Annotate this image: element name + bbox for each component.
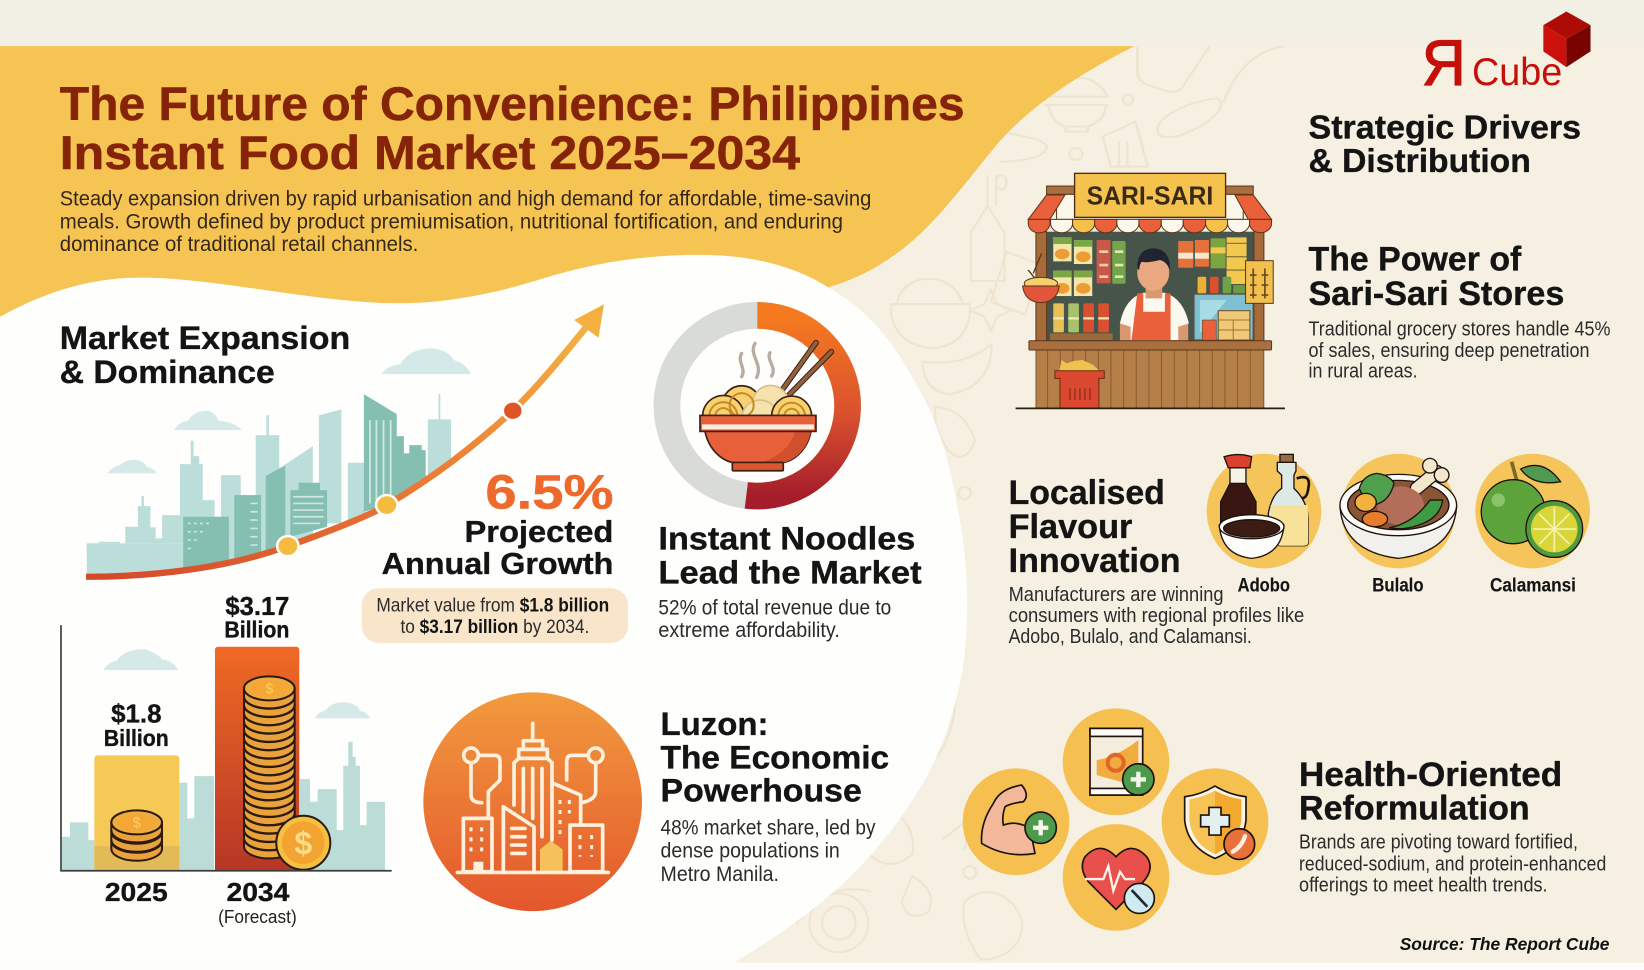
Luzon text: Powerhouse — [661, 773, 862, 809]
donut chart: noodles 52% — [667, 315, 848, 496]
flavour text: Localised — [1009, 474, 1165, 512]
skyline behind bars — [62, 742, 385, 870]
coin stack 2034 — [244, 676, 295, 858]
health icons — [963, 708, 1268, 931]
label: Bulalo — [1372, 576, 1424, 597]
market value pill: Market value from $1.8 billion — [376, 594, 609, 616]
top band — [0, 0, 1644, 46]
skyline growth chart — [86, 304, 604, 590]
store sign: SARI-SARI — [1087, 180, 1213, 210]
intro text — [60, 187, 871, 256]
bar chart: market value: 2034 — [226, 877, 290, 907]
flavour text: Manufacturers are winning — [1009, 583, 1224, 606]
intro text: dominance of traditional retail channels. — [60, 232, 418, 256]
clouds behind bars — [103, 649, 370, 718]
heading: strategic drivers — [1308, 109, 1581, 180]
icon: protein muscle — [963, 768, 1069, 875]
noodles text: 52% of total revenue due to — [658, 597, 891, 620]
till and goods — [1194, 294, 1253, 340]
hanging noodle bowl — [1023, 253, 1059, 303]
sari-sari text — [1308, 241, 1610, 383]
flavour text — [1009, 474, 1304, 648]
counter — [1029, 341, 1272, 408]
heading: market expansion: Market Expansion — [60, 320, 350, 356]
noodles text: Lead the Market — [658, 555, 922, 591]
title — [60, 77, 965, 179]
icon: bulalo — [1340, 454, 1457, 568]
value labels: $3.17 — [225, 591, 289, 621]
icon: adobo — [1207, 454, 1321, 568]
coin stack 2025: $ — [133, 815, 141, 831]
source note: Source: The Report Cube — [1400, 934, 1609, 954]
flavour icons — [1207, 454, 1590, 597]
sari-sari text: Sari-Sari Stores — [1308, 275, 1564, 313]
white content blob — [0, 255, 967, 963]
coin stack 2034: $ — [265, 681, 273, 697]
coin stack 2025 — [111, 810, 162, 861]
chart axes — [61, 625, 392, 871]
icon: Luzon city circle — [423, 692, 642, 911]
intro text: Steady expansion driven by rapid urbanisation and high demand for affordable, time-saving — [60, 187, 871, 211]
illustration: sari-sari store — [1016, 173, 1285, 408]
title: The Future of Convenience: Philippines — [60, 77, 965, 130]
bar chart: market value — [61, 591, 392, 927]
title: Instant Food Market 2025–2034 — [60, 126, 800, 179]
sari-sari text: in rural areas. — [1308, 360, 1418, 383]
bar chart: market value: (Forecast) — [218, 906, 297, 927]
year labels: 2025 — [105, 877, 168, 907]
bottom band — [0, 963, 1644, 970]
icon: calamansi — [1475, 454, 1590, 568]
bar chart: market value: Billion — [104, 725, 169, 751]
icon: shield — [1162, 768, 1268, 875]
Luzon text — [661, 706, 889, 886]
icon: fortified packet — [1063, 708, 1169, 815]
growth callout: Projected — [464, 515, 613, 549]
windows — [471, 800, 592, 857]
label: Calamansi — [1490, 576, 1576, 597]
health text: Health-Oriented — [1299, 756, 1562, 794]
logo: RCube — [1422, 12, 1591, 99]
hanging goods — [1050, 237, 1247, 340]
sari-sari text: of sales, ensuring deep penetration — [1308, 339, 1589, 362]
Luzon text: Metro Manila. — [661, 863, 779, 886]
growth callout: 6.5% — [485, 466, 613, 520]
heading: strategic drivers: & Distribution — [1308, 143, 1531, 180]
Luzon text: Luzon: — [661, 706, 769, 742]
Luzon text: The Economic — [661, 740, 889, 776]
light buildings — [87, 394, 451, 573]
noodles text — [658, 520, 922, 642]
bar 2025 — [94, 755, 179, 871]
growth arrow — [86, 320, 592, 577]
background food doodles — [797, 47, 1283, 960]
label: Adobo — [1238, 576, 1290, 597]
bar 2034 — [215, 647, 299, 871]
Luzon text: dense populations in — [661, 839, 840, 862]
basket — [1055, 360, 1104, 408]
growth callout — [362, 466, 628, 643]
shop keeper — [1120, 248, 1189, 341]
large coin: $ — [294, 825, 312, 861]
health text — [1299, 756, 1606, 896]
logo: RCube: Cube — [1472, 51, 1562, 94]
heading: market expansion — [60, 320, 350, 390]
bar chart: market value: $1.8 — [111, 699, 161, 729]
health text: offerings to meet health trends. — [1299, 873, 1548, 896]
sari-sari text: Traditional grocery stores handle 45% — [1308, 318, 1610, 341]
health text: Brands are pivoting toward fortified, — [1299, 830, 1578, 853]
mask under the curve — [86, 411, 513, 590]
flavour text: Innovation — [1009, 542, 1181, 580]
growth callout: Annual Growth — [382, 547, 613, 581]
heading: strategic drivers: Strategic Drivers — [1308, 109, 1581, 146]
market value pill: to $3.17 billion by 2034. — [401, 616, 589, 638]
awning — [1028, 194, 1272, 233]
icon: noodle bowl — [700, 343, 831, 471]
noodles text: extreme affordability. — [658, 619, 840, 642]
dark buildings — [183, 394, 426, 573]
store sign — [1075, 173, 1226, 217]
Luzon text: 48% market share, led by — [661, 817, 876, 840]
clouds — [107, 348, 471, 473]
sari-sari text: The Power of — [1308, 241, 1522, 279]
noodles text: Instant Noodles — [658, 520, 915, 556]
price sign — [1246, 261, 1273, 303]
health text: Reformulation — [1299, 790, 1530, 828]
bar chart: market value: Billion — [224, 617, 289, 643]
icon: heart — [1063, 824, 1169, 931]
large coin — [276, 816, 330, 870]
flavour text: consumers with regional profiles like — [1009, 604, 1304, 627]
flavour text: Flavour — [1009, 508, 1132, 546]
logo: RCube: Я — [1422, 26, 1466, 99]
market value pill — [362, 588, 628, 643]
flavour text: Adobo, Bulalo, and Calamansi. — [1009, 625, 1252, 648]
yellow header wave — [0, 46, 1134, 440]
heading: market expansion: & Dominance — [60, 354, 275, 390]
intro text: meals. Growth defined by product premiumisation, nutritional fortification, and enduring — [60, 210, 843, 234]
